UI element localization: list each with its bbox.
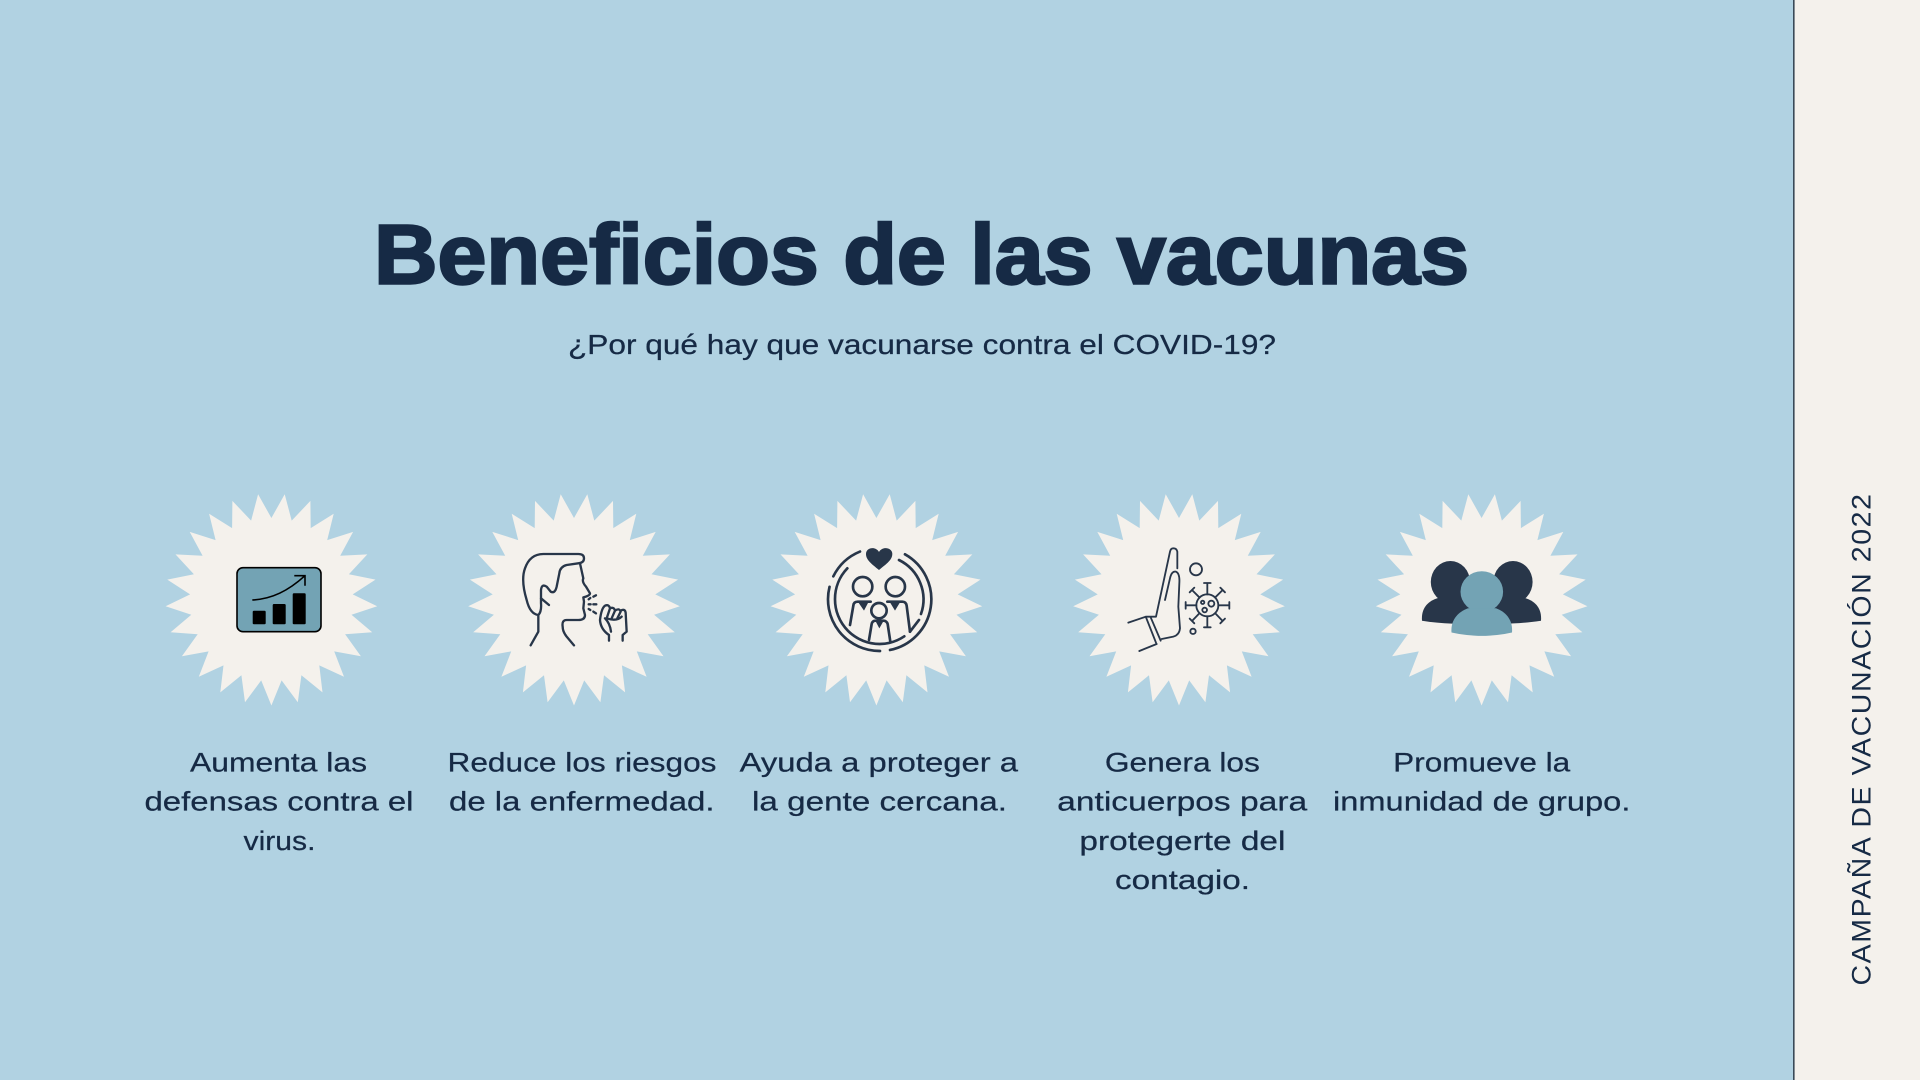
subtitle: ¿Por qué hay que vacunarse contra el COVID-19? [568, 329, 1276, 360]
panel: right side band [1793, 0, 1920, 1080]
text: benefit 4: protegerte del [1079, 826, 1285, 856]
vertical side label: CAMPAÑA DE VACUNACIÓN 2022 [1846, 492, 1877, 986]
text: benefit 4: contagio. [1115, 865, 1250, 895]
panel: benefit 1 [144, 494, 414, 856]
icon: person coughing into fist [523, 554, 627, 645]
icon: family in a circle with heart [828, 548, 931, 651]
text: benefit 1 [144, 748, 414, 856]
text: benefit 5: inmunidad de grupo. [1333, 787, 1630, 817]
starburst 2 [468, 494, 680, 706]
text: benefit 1: Aumenta las [190, 748, 367, 778]
icon: group of people [1422, 561, 1541, 636]
text: benefit 2 [448, 748, 716, 817]
panel: benefit 2 [448, 494, 716, 817]
text: benefit 3 [740, 748, 1019, 817]
text: benefit 4: Genera los [1105, 748, 1260, 778]
icon: hand stopping virus [1128, 548, 1229, 651]
text: benefit 5 [1333, 748, 1630, 817]
title: Beneficios de las vacunas [374, 208, 1469, 302]
text: benefit 5: Promueve la [1393, 748, 1571, 778]
starburst 3 [771, 494, 982, 706]
panel: benefit 5 [1333, 494, 1630, 817]
text: benefit 2: Reduce los riesgos [448, 748, 716, 778]
starburst 1 [166, 494, 377, 706]
starburst 5 [1376, 494, 1587, 706]
text: benefit 2: de la enfermedad. [449, 787, 714, 817]
panel: benefit 4 [1057, 494, 1308, 895]
text: benefit 4 [1057, 748, 1308, 895]
text: benefit 3: la gente cercana. [752, 787, 1007, 817]
text: benefit 1: defensas contra el [144, 787, 414, 817]
text: benefit 1: virus. [244, 826, 316, 856]
text: benefit 3: Ayuda a proteger a [740, 748, 1019, 778]
panel: benefit 3 [740, 494, 1019, 817]
starburst 4 [1073, 494, 1285, 706]
icon: rising chart [237, 568, 321, 632]
text: benefit 4: anticuerpos para [1057, 787, 1308, 817]
